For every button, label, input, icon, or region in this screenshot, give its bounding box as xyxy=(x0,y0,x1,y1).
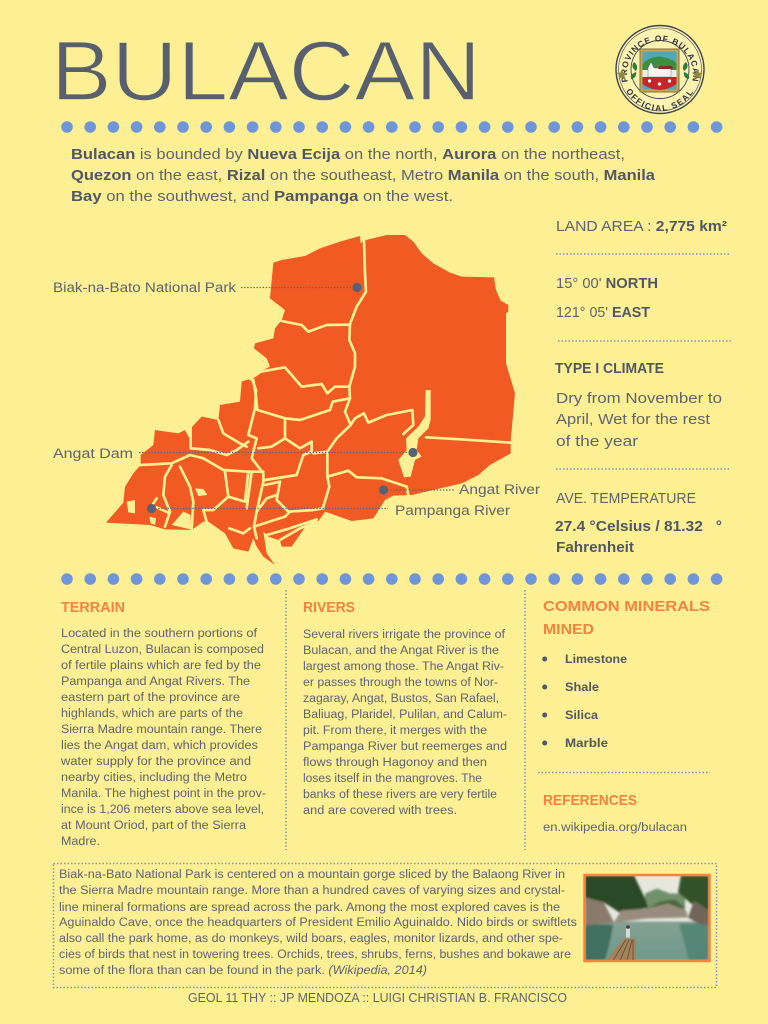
intro text block xyxy=(71,146,656,205)
park description text xyxy=(59,869,577,977)
panel: average temperature: 27.4 °Celsius / 81.32 ° xyxy=(555,519,722,535)
callout: Angat River: Angat River xyxy=(459,482,541,497)
rivers text: loses itself in the mangroves. The xyxy=(303,773,482,785)
callout: Pampanga River xyxy=(147,503,511,518)
terrain text: Located in the southern portions of xyxy=(61,628,258,640)
panel: coordinates: 15° 00' NORTH xyxy=(556,276,658,292)
icon: official seal xyxy=(615,24,705,114)
rivers text: zagaray, Angat, Bustos, San Rafael, xyxy=(303,693,499,705)
rivers text: Baliuag, Plaridel, Pulilan, and Calum- xyxy=(303,709,507,721)
municipal borders: west xyxy=(127,378,323,540)
panel: climate: of the year xyxy=(556,434,638,450)
terrain text: eastern part of the province are xyxy=(61,692,240,704)
panel: average temperature xyxy=(555,491,722,556)
panel: land area: LAND AREA : 2,775 km² xyxy=(556,219,727,235)
rivers text: largest among those. The Angat Riv- xyxy=(303,661,504,673)
rivers text: flows through Hagonoy and then xyxy=(303,757,487,769)
minerals list xyxy=(542,652,627,750)
rivers text: banks of these rivers are very fertile xyxy=(303,789,497,801)
heading: common minerals: COMMON MINERALS xyxy=(543,598,710,615)
panel: coordinates xyxy=(556,276,658,321)
panel: climate: Dry from November to xyxy=(556,391,722,407)
park description text: the Sierra Madre mountain range. More than a hundred caves of varying sizes and crystal- xyxy=(59,885,565,897)
heading: common minerals xyxy=(543,598,710,638)
panel: average temperature: AVE. TEMPERATURE xyxy=(556,491,696,507)
terrain text: nearby cities, including the Metro xyxy=(61,772,247,784)
intro text block: Quezon on the east, Rizal on the southeast, Metro Manila on the south, Manila xyxy=(71,167,656,184)
rivers text: pit. From there, it merges with the xyxy=(303,725,487,737)
park description text: also call the park home, as do monkeys, wild boars, eagles, monitor lizards, and other spe- xyxy=(59,933,563,945)
terrain text: highlands, which are parts of the xyxy=(61,708,243,720)
minerals list: Silica xyxy=(565,708,598,722)
panel: climate: April, Wet for the rest xyxy=(556,412,710,428)
photo: river gorge with bamboo raft xyxy=(586,876,708,960)
minerals list: Marble xyxy=(565,736,608,750)
panel: rivers xyxy=(303,599,507,817)
map of Bulacan xyxy=(106,235,515,565)
terrain text: at Mount Oriod, part of the Sierra xyxy=(61,820,247,832)
panel: climate: TYPE I CLIMATE xyxy=(555,361,664,377)
terrain text xyxy=(60,628,266,848)
terrain text: lies the Angat dam, which provides xyxy=(61,740,258,752)
panel: references: REFERENCES xyxy=(543,792,637,809)
terrain text: Manila. The highest point in the prov- xyxy=(61,788,266,800)
minerals list: Limestone xyxy=(565,652,627,666)
rivers text: and are covered with trees. xyxy=(303,805,457,817)
park description text: Aguinaldo Cave, once the headquarters of President Emilio Aguinaldo. Nido birds or swiftlets xyxy=(59,917,577,929)
rivers text xyxy=(303,629,507,817)
heading: terrain: TERRAIN xyxy=(61,599,125,616)
intro text block: Bulacan is bounded by Nueva Ecija on the north, Aurora on the northeast, xyxy=(71,146,625,163)
panel: coordinates: 121° 05' EAST xyxy=(556,305,650,321)
terrain text: Pampanga and Angat Rivers. The xyxy=(61,676,250,688)
terrain text: Central Luzon, Bulacan is composed xyxy=(61,644,264,656)
park description text: Biak-na-Bato National Park is centered on a mountain gorge sliced by the Balaong River in xyxy=(59,869,565,881)
terrain text: Madre. xyxy=(61,836,100,848)
title: BULACAN xyxy=(51,24,481,118)
panel: references: en.wikipedia.org/bulacan xyxy=(543,822,687,834)
park description text: some of the flora than can be found in the park. (Wikipedia, 2014) xyxy=(59,965,427,977)
panel: terrain xyxy=(60,599,266,848)
heading: common minerals: MINED xyxy=(543,621,594,638)
terrain text: of fertile plains which are fed by the xyxy=(61,660,261,672)
intro text block: Bay on the southwest, and Pampanga on the west. xyxy=(71,188,453,205)
terrain text: ince is 1,206 meters above sea level, xyxy=(61,804,264,816)
icon: official seal: OFFICIAL SEAL xyxy=(627,89,694,111)
callout: Biak-na-Bato National Park: Biak-na-Bato National Park xyxy=(53,280,236,295)
panel: common minerals mined xyxy=(542,598,710,750)
panel: average temperature: Fahrenheit xyxy=(556,540,634,556)
park description text: cies of birds that nest in towering trees. Orchids, trees, shrubs, ferns, bushes and bokawe are xyxy=(59,949,571,961)
icon: official seal: PROVINCE OF BULACAN xyxy=(622,36,699,82)
rivers text: Bulacan, and the Angat River is the xyxy=(303,645,499,657)
terrain text: Sierra Madre mountain range. There xyxy=(61,724,262,736)
callout: Angat River xyxy=(379,482,541,497)
heading: rivers: RIVERS xyxy=(303,599,355,616)
panel: references xyxy=(543,792,687,834)
callout: Angat Dam xyxy=(53,446,418,461)
rivers text: er passes through the towns of Nor- xyxy=(303,677,498,689)
panel: climate xyxy=(555,361,722,450)
callout: Pampanga River: Pampanga River xyxy=(395,503,511,518)
callout: Biak-na-Bato National Park xyxy=(53,280,362,295)
panel: Biak-na-Bato National Park xyxy=(54,864,716,988)
province shape xyxy=(106,235,515,565)
rivers text: Several rivers irrigate the province of xyxy=(303,629,506,641)
callout: Angat Dam: Angat Dam xyxy=(53,446,133,461)
park description text: line mineral formations are spread across the park. Among the most explored caves is the xyxy=(59,902,560,914)
footer credits: GEOL 11 THY :: JP MENDOZA :: LUIGI CHRISTIAN B. FRANCISCO xyxy=(188,991,567,1005)
minerals list: Shale xyxy=(565,680,599,694)
rivers text: Pampanga River but reemerges and xyxy=(303,741,507,753)
municipal borders: east xyxy=(250,241,511,507)
terrain text: water supply for the province and xyxy=(60,756,251,768)
